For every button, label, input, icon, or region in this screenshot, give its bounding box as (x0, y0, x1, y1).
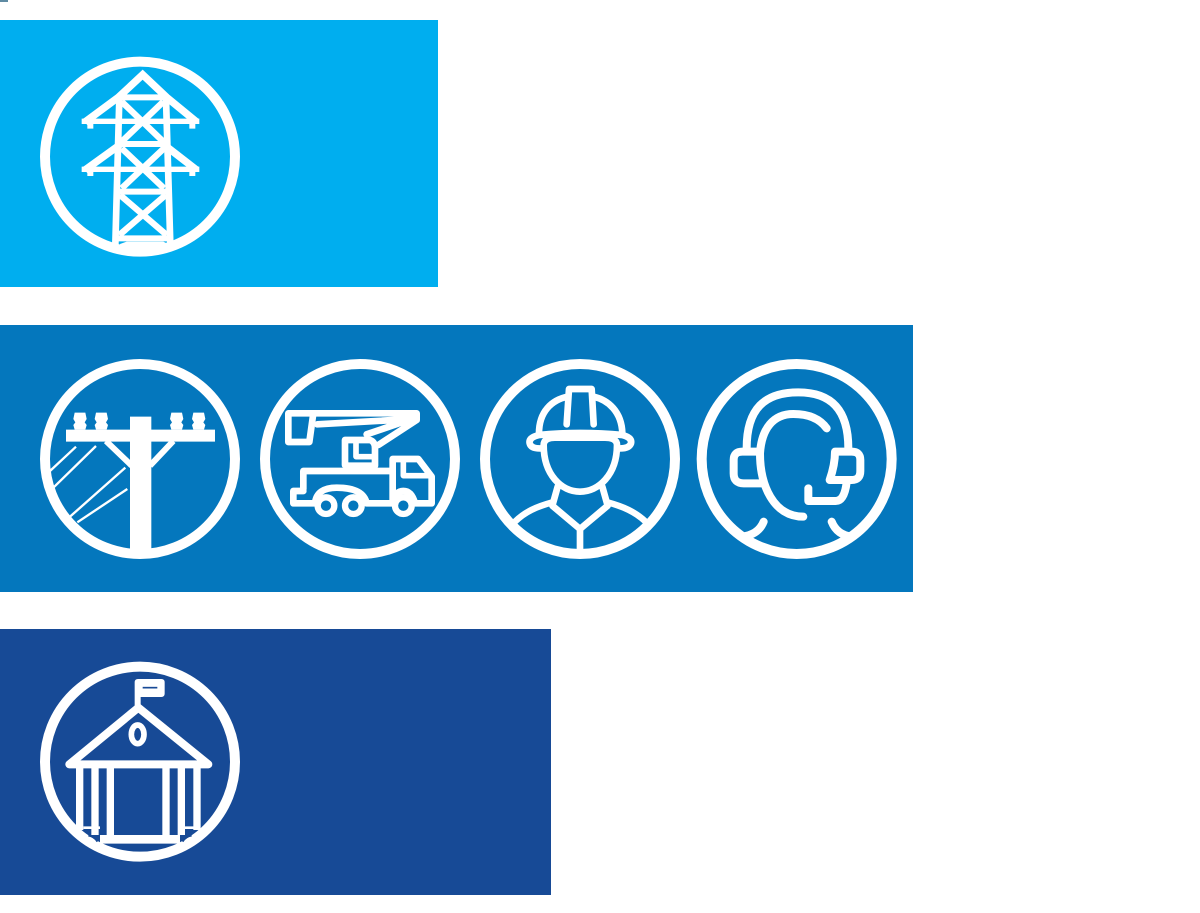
light blue band (0, 20, 438, 287)
icon: schoolhouse (45, 667, 235, 857)
icon: customer service headset (702, 364, 892, 554)
icon: utility pole (45, 364, 235, 554)
panel: distribution and field service (0, 325, 913, 592)
panel: transmission (0, 20, 438, 287)
icon: bucket truck (265, 364, 455, 554)
panel: community (0, 629, 551, 895)
dark blue band (0, 629, 551, 895)
corner mark (0, 0, 8, 2)
medium blue band (0, 325, 913, 592)
icon: line worker with hard hat (485, 364, 675, 554)
icon: transmission tower (45, 62, 235, 252)
